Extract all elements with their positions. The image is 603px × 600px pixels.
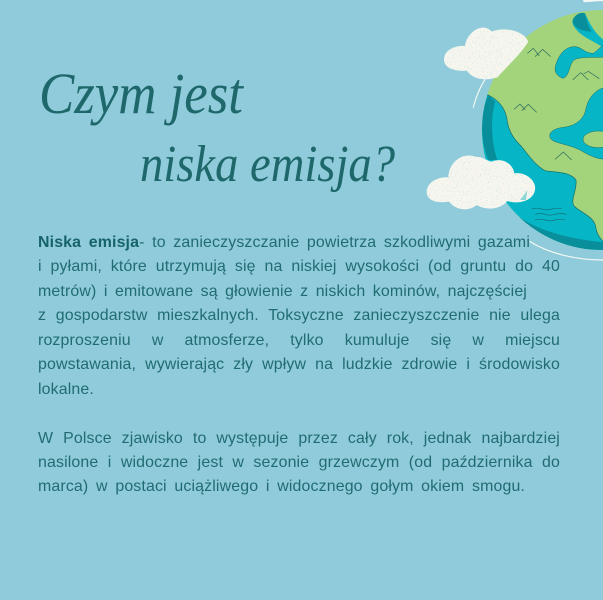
illustration: globe with clouds [426,0,603,261]
paragraph: definition of low emission: powstawania, wywierając zły wpływ na ludzkie zdrowie i środowisko [38,356,560,373]
globe [482,10,603,250]
paragraph: smog in Poland: marca) w postaci uciążliwego i widocznego gołym okiem smogu. [38,478,525,495]
paragraph: smog in Poland [38,430,560,495]
ocean: lower left [482,94,603,250]
speckled shading on rim [482,13,603,250]
cloud: upper [444,28,528,80]
paragraph: smog in Poland: W Polsce zjawisko to występuje przez cały rok, jednak najbardziej [38,430,560,447]
paragraph: definition of low emission: Niska emisja- to zanieczyszczanie powietrza szkodliwymi gazami [38,234,530,250]
cloud: lower [426,156,536,210]
waves [532,208,567,221]
paragraph: definition of low emission: lokalne. [38,380,94,398]
orbit lines [473,0,603,260]
mountains [514,48,599,160]
paragraph: definition of low emission: z gospodarstw mieszkalnych. Toksyczne zanieczyszczenie nie ulega [38,307,560,324]
title: niska emisja? [140,136,395,193]
paragraph: definition of low emission: metrów) i emitowane są głowienie z niskich kominów, najczęściej [38,282,527,300]
paragraph: definition of low emission [38,234,560,398]
paragraph: definition of low emission: i pyłami, które utrzymują się na niskiej wysokości (od gruntu do 40 [38,258,560,275]
paragraph: smog in Poland: nasilone i widoczne jest w sezonie grzewczym (od października do [38,454,560,471]
island [583,131,603,148]
ocean: middle inland sea [550,87,603,159]
ocean: upper inland sea [555,43,603,78]
title: Czym jest [39,61,245,126]
paragraph: definition of low emission: rozproszeniu w atmosferze, tylko kumuluje się w miejscu [38,332,560,348]
ocean: top-right bay [572,13,603,50]
